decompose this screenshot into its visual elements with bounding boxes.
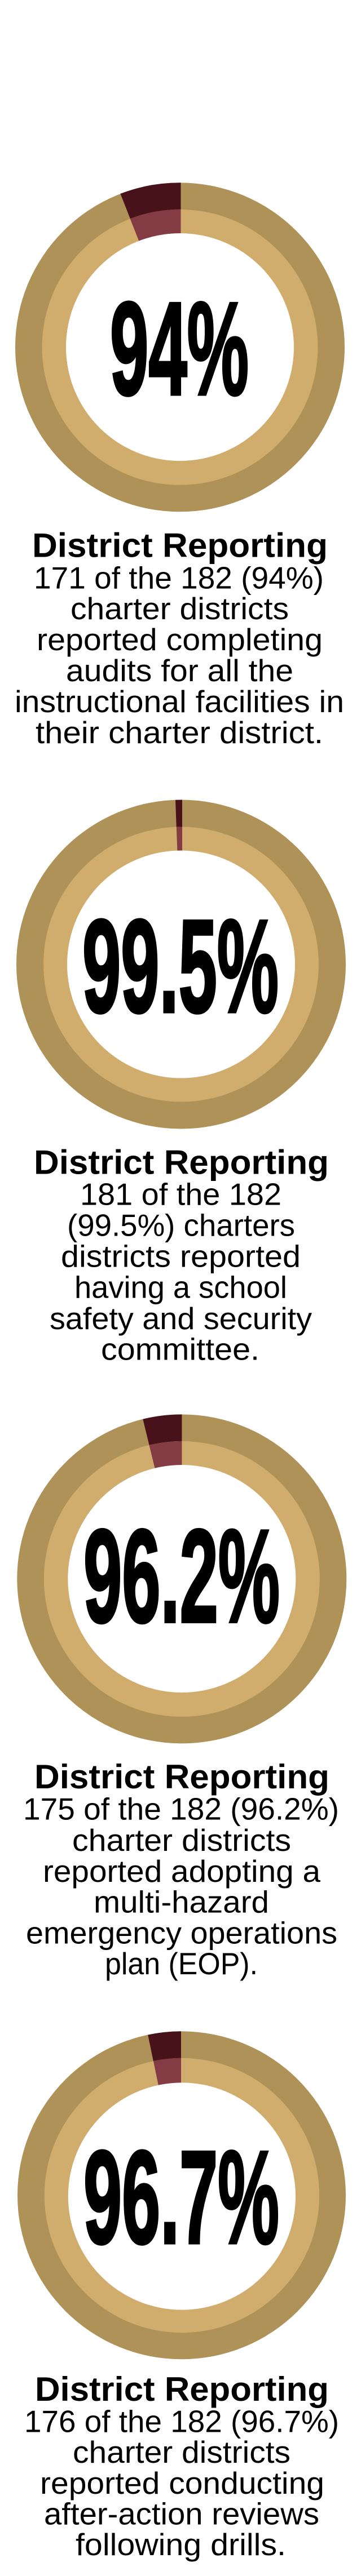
description bbox=[23, 1792, 339, 1981]
description: reported completing bbox=[37, 622, 323, 657]
description: instructional facilities in bbox=[15, 684, 344, 719]
description: safety and security bbox=[50, 1301, 312, 1336]
panel: 94 percent audits bbox=[15, 183, 345, 750]
heading: District Reporting bbox=[34, 1143, 329, 1181]
description: charter districts bbox=[73, 2435, 290, 2470]
description: multi-hazard bbox=[94, 1885, 269, 1920]
description: following drills. bbox=[76, 2527, 286, 2562]
description: charter districts bbox=[71, 591, 289, 626]
heading: District Reporting bbox=[32, 526, 328, 565]
panel: 96.7 percent after-action reviews bbox=[17, 2031, 346, 2562]
description bbox=[50, 1176, 312, 1367]
donut chart: 99.5% bbox=[16, 800, 346, 1129]
description: reported conducting bbox=[40, 2466, 324, 2501]
description: their charter district. bbox=[36, 715, 323, 750]
description: having a school bbox=[74, 1269, 287, 1304]
description: 175 of the 182 (96.2%) bbox=[23, 1792, 339, 1827]
description bbox=[24, 2404, 339, 2562]
description: 176 of the 182 (96.7%) bbox=[24, 2404, 339, 2439]
description: audits for all the bbox=[66, 653, 293, 688]
description: charter districts bbox=[72, 1823, 291, 1858]
description: reported adopting a bbox=[43, 1854, 320, 1889]
heading: District Reporting bbox=[34, 1758, 329, 1796]
heading: District Reporting bbox=[35, 2370, 329, 2408]
description: 171 of the 182 (94%) bbox=[34, 560, 324, 595]
donut chart: 96.7% bbox=[17, 2031, 346, 2359]
description: after-action reviews bbox=[44, 2496, 319, 2531]
panel: 99.5 percent committee bbox=[16, 800, 346, 1367]
description bbox=[15, 560, 344, 750]
panel: 96.2 percent emergency plan bbox=[17, 1414, 346, 1981]
description: (99.5%) charters bbox=[67, 1207, 295, 1242]
description: plan (EOP). bbox=[105, 1946, 258, 1981]
donut chart: 96.2% bbox=[17, 1414, 346, 1743]
description: emergency operations bbox=[26, 1916, 337, 1951]
description: districts reported bbox=[61, 1238, 301, 1273]
description: committee. bbox=[101, 1332, 259, 1367]
description: 181 of the 182 bbox=[80, 1176, 281, 1211]
donut chart: 94% bbox=[15, 183, 345, 512]
